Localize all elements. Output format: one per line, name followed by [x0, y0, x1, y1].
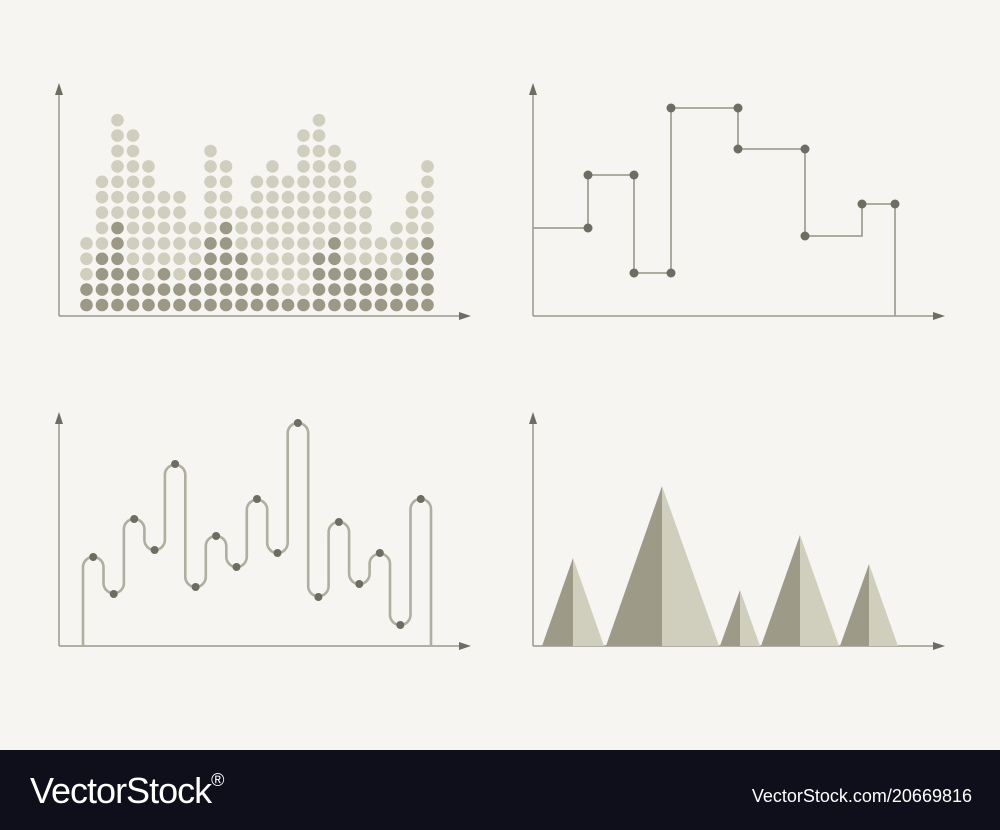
dots [80, 114, 434, 311]
wave path [83, 423, 431, 646]
chart: triangles [529, 412, 945, 650]
triangles [542, 486, 898, 646]
axes: triangle chart [529, 412, 945, 650]
axes: step chart [529, 83, 945, 320]
axes: dot chart [55, 83, 471, 320]
step line [533, 108, 895, 316]
chart: wave line [55, 412, 471, 650]
chart: step line [529, 83, 945, 320]
step markers [584, 104, 900, 278]
chart: dot column chart [55, 83, 471, 320]
footer [0, 750, 1000, 830]
wave markers [89, 419, 425, 629]
footer logo: VectorStock® [30, 770, 223, 811]
footer url: VectorStock.com/20669816 [752, 786, 972, 806]
axes: wave chart [55, 412, 471, 650]
